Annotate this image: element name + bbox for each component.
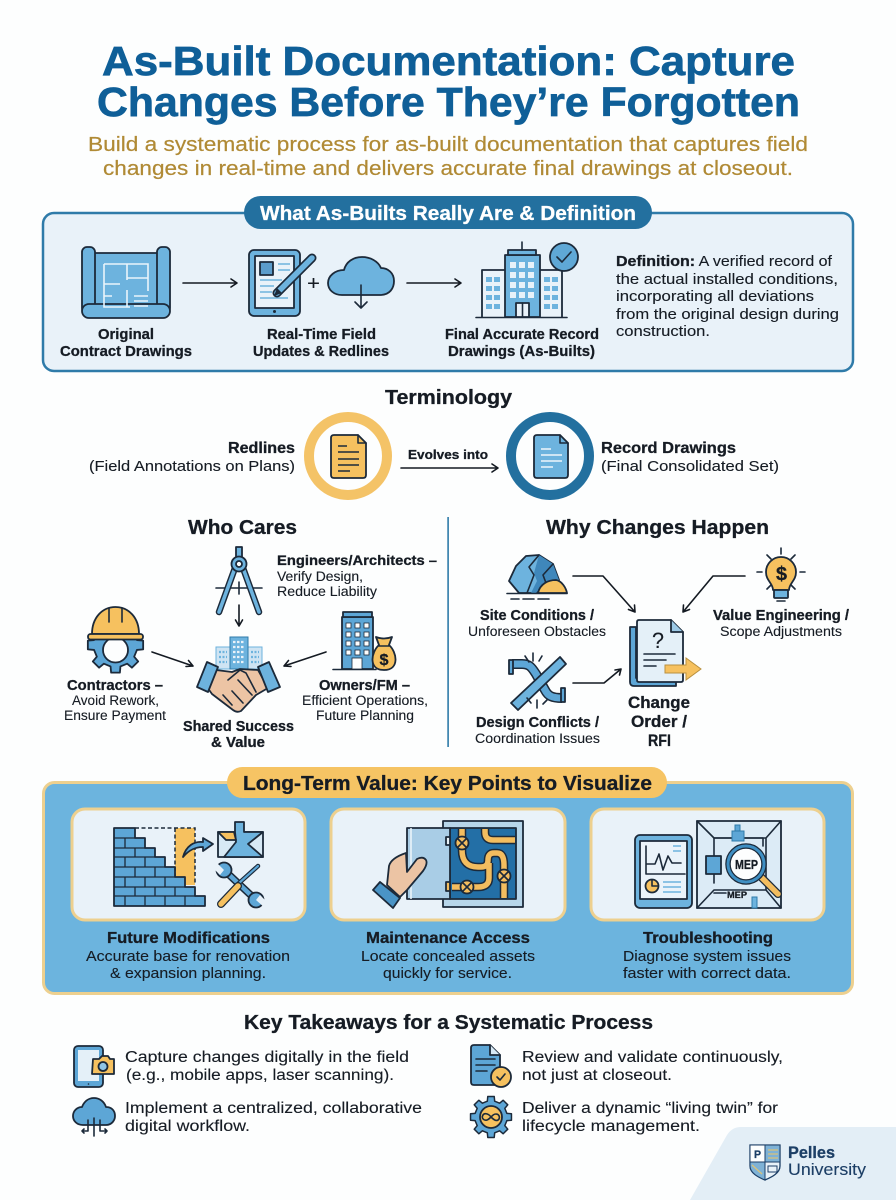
text: contractors: Ensure Payment xyxy=(64,708,166,723)
icon: change order document xyxy=(630,620,701,686)
text: design conflicts: Design Conflicts / xyxy=(476,715,599,731)
icon: compass xyxy=(216,547,262,612)
icon: owner building and money bag: $ xyxy=(380,652,389,669)
label: record drawings: (Final Consolidated Set) xyxy=(601,458,779,475)
label: redlines: (Field Annotations on Plans) xyxy=(89,458,295,475)
icon: value engineering bulb xyxy=(757,548,805,601)
icon: design conflict pipes xyxy=(509,653,566,710)
text: engineers and architects xyxy=(277,552,437,599)
subtitle: Build a systematic process for as-built documentation that captures field xyxy=(88,134,808,156)
icon: handshake with buildings xyxy=(197,637,280,712)
icon: cloud download xyxy=(328,257,394,308)
text: owners: Efficient Operations, xyxy=(302,693,428,708)
subtitle xyxy=(88,134,808,180)
text: maintenance access: Maintenance Access xyxy=(366,930,530,947)
takeaway text: review and validate: not just at closeout. xyxy=(522,1067,672,1084)
text: engineers and architects: Engineers/Architects – xyxy=(277,552,437,568)
arrow: evolves into xyxy=(401,447,498,472)
label: redlines xyxy=(89,440,295,475)
arrow: owners to shared success xyxy=(284,652,326,666)
icon: document with check xyxy=(471,1045,511,1087)
definition text: Definition: A verified record of xyxy=(616,254,833,270)
text: future modifications: Accurate base for renovation xyxy=(86,949,290,965)
takeaway text: capture changes xyxy=(125,1049,409,1084)
label: final record drawings: Final Accurate Record xyxy=(445,326,599,343)
text: design conflicts xyxy=(475,715,600,746)
heading: terminology: Terminology xyxy=(385,387,513,409)
icon: tablet and MEP magnifier: MEP xyxy=(735,858,758,872)
icon: tablet with camera xyxy=(74,1046,114,1087)
text: shared success: Shared Success xyxy=(183,719,294,735)
text: value engineering: Value Engineering / xyxy=(713,608,849,624)
icon: rock xyxy=(507,555,567,599)
text: change order / rfi: Change xyxy=(628,694,690,712)
definition text xyxy=(616,254,839,340)
arrow: drawings to updates xyxy=(183,279,237,287)
text: contractors xyxy=(64,678,166,723)
label: final record drawings xyxy=(445,326,599,360)
logo: pelles university: Pelles xyxy=(788,1144,835,1162)
text: future modifications: & expansion planning. xyxy=(110,966,266,982)
icon: cloud workflow xyxy=(73,1098,115,1136)
takeaway text: capture changes: Capture changes digitally in the field xyxy=(125,1049,409,1066)
heading: why changes happen: Why Changes Happen xyxy=(546,517,769,539)
title: Changes Before They’re Forgotten xyxy=(97,79,800,125)
text: owners: Owners/FM – xyxy=(319,678,410,694)
text: engineers and architects: Verify Design, xyxy=(277,569,363,584)
label: real-time field updates: Real-Time Field xyxy=(267,326,376,343)
panel: why changes happen xyxy=(468,517,849,750)
heading: key takeaways: Key Takeaways for a Systematic Process xyxy=(244,1012,653,1034)
icon: change order document: ? xyxy=(652,628,664,653)
text: maintenance access xyxy=(361,930,535,982)
arrow: site conditions to change order xyxy=(573,576,635,612)
icon: building with check xyxy=(476,242,578,318)
card: maintenance access xyxy=(331,809,565,920)
icon: hard hat and gear xyxy=(88,607,143,673)
definition text: incorporating all deviations xyxy=(616,289,814,305)
icon: value engineering bulb: $ xyxy=(776,564,787,585)
text: site conditions xyxy=(468,608,606,639)
subtitle: changes in real-time and delivers accurate final drawings at closeout. xyxy=(103,158,793,180)
icon: owner building and money bag xyxy=(333,612,396,670)
heading: what as-builts really are: What As-Builts Really Are & Definition xyxy=(260,203,636,225)
label: real-time field updates xyxy=(253,326,389,360)
icon: record drawing document ring xyxy=(511,417,589,495)
icon: redlines document ring xyxy=(309,417,387,495)
panel: key takeaways xyxy=(73,1012,783,1137)
logo: pelles university xyxy=(690,1127,896,1200)
takeaway text: capture changes: (e.g., mobile apps, laser scanning). xyxy=(126,1067,394,1084)
icon: shield xyxy=(750,1145,780,1180)
icon: gear with infinity xyxy=(471,1097,511,1137)
text: future modifications: Future Modifications xyxy=(107,930,270,947)
label: redlines: Redlines xyxy=(228,440,295,457)
text: value engineering: Scope Adjustments xyxy=(720,624,842,639)
card: troubleshooting xyxy=(591,809,824,920)
panel: long-term value xyxy=(44,767,852,994)
text: site conditions: Unforeseen Obstacles xyxy=(468,624,606,639)
label: record drawings xyxy=(601,440,779,475)
label: original contract drawings: Contract Drawings xyxy=(60,343,192,360)
text: troubleshooting: Troubleshooting xyxy=(643,930,773,947)
takeaway text: review and validate xyxy=(522,1049,783,1084)
text: troubleshooting: Diagnose system issues xyxy=(623,949,791,965)
icon: tablet and MEP magnifier: MEP xyxy=(727,890,748,901)
text: troubleshooting xyxy=(623,930,791,982)
heading: what as-builts really are xyxy=(244,196,652,229)
text: maintenance access: quickly for service. xyxy=(383,966,512,982)
text: shared success xyxy=(183,719,294,751)
text: contractors: Contractors – xyxy=(67,678,163,694)
icon: tablet with pencil xyxy=(249,250,312,316)
text: owners xyxy=(302,678,428,723)
takeaway text: centralized workflow xyxy=(125,1100,422,1135)
takeaway text: review and validate: Review and validate continuously, xyxy=(522,1049,783,1066)
takeaway text: centralized workflow: digital workflow. xyxy=(125,1118,250,1135)
icon: brick wall and tools xyxy=(114,822,267,908)
section: terminology xyxy=(89,387,779,495)
text: design conflicts: Coordination Issues xyxy=(475,731,600,746)
takeaway text: living twin: Deliver a dynamic “living twin” for xyxy=(522,1100,778,1117)
text: contractors: Avoid Rework, xyxy=(72,693,159,708)
arrow: contractors to shared success xyxy=(152,652,193,666)
title: As-Built Documentation: Capture xyxy=(102,38,795,84)
takeaway text: centralized workflow: Implement a centralized, collaborative xyxy=(125,1100,422,1117)
heading: long-term value xyxy=(227,767,667,798)
icon: blueprint xyxy=(82,247,170,318)
text: owners: Future Planning xyxy=(316,708,414,723)
heading: long-term value: Long-Term Value: Key Points to Visualize xyxy=(243,773,652,795)
card: future modifications xyxy=(72,809,305,920)
text: change order / rfi: RFI xyxy=(648,732,671,750)
panel: who cares xyxy=(64,517,437,751)
arrow: updates to final xyxy=(407,279,461,287)
definition text: the actual installed conditions, xyxy=(616,272,838,288)
text: maintenance access: Locate concealed assets xyxy=(361,949,535,965)
label: record drawings: Record Drawings xyxy=(601,440,736,457)
text: troubleshooting: faster with correct data. xyxy=(623,966,791,982)
icon: tablet and MEP magnifier xyxy=(635,821,781,908)
takeaway text: living twin: lifecycle management. xyxy=(522,1118,700,1135)
title xyxy=(97,38,800,125)
label: original contract drawings: Original xyxy=(98,326,154,343)
text: shared success: & Value xyxy=(211,735,265,751)
definition text: from the original design during xyxy=(616,307,839,323)
text: value engineering xyxy=(713,608,849,639)
arrow: value engineering to change order xyxy=(683,576,745,612)
label: original contract drawings xyxy=(60,326,192,360)
label: final record drawings: Drawings (As-Builts) xyxy=(448,343,595,360)
logo: pelles university: University xyxy=(788,1161,867,1179)
panel: what as-builts really are xyxy=(43,196,853,371)
heading: who cares: Who Cares xyxy=(188,517,297,539)
text: change order / rfi xyxy=(628,694,690,750)
text: future modifications xyxy=(86,930,290,982)
definition text: construction. xyxy=(616,324,710,340)
icon: shield: P xyxy=(754,1149,761,1161)
text: engineers and architects: Reduce Liability xyxy=(277,584,377,599)
text: change order / rfi: Order / xyxy=(631,713,687,731)
arrow: evolves into: Evolves into xyxy=(408,447,488,462)
plus sign: + xyxy=(307,273,320,295)
text: site conditions: Site Conditions / xyxy=(480,608,594,624)
arrow: design conflicts to change order xyxy=(573,669,621,683)
icon: access panel with pipes and hand xyxy=(373,821,523,908)
takeaway text: living twin xyxy=(522,1100,778,1135)
label: real-time field updates: Updates & Redlines xyxy=(253,343,389,360)
arrow: engineers to shared success xyxy=(236,605,242,626)
